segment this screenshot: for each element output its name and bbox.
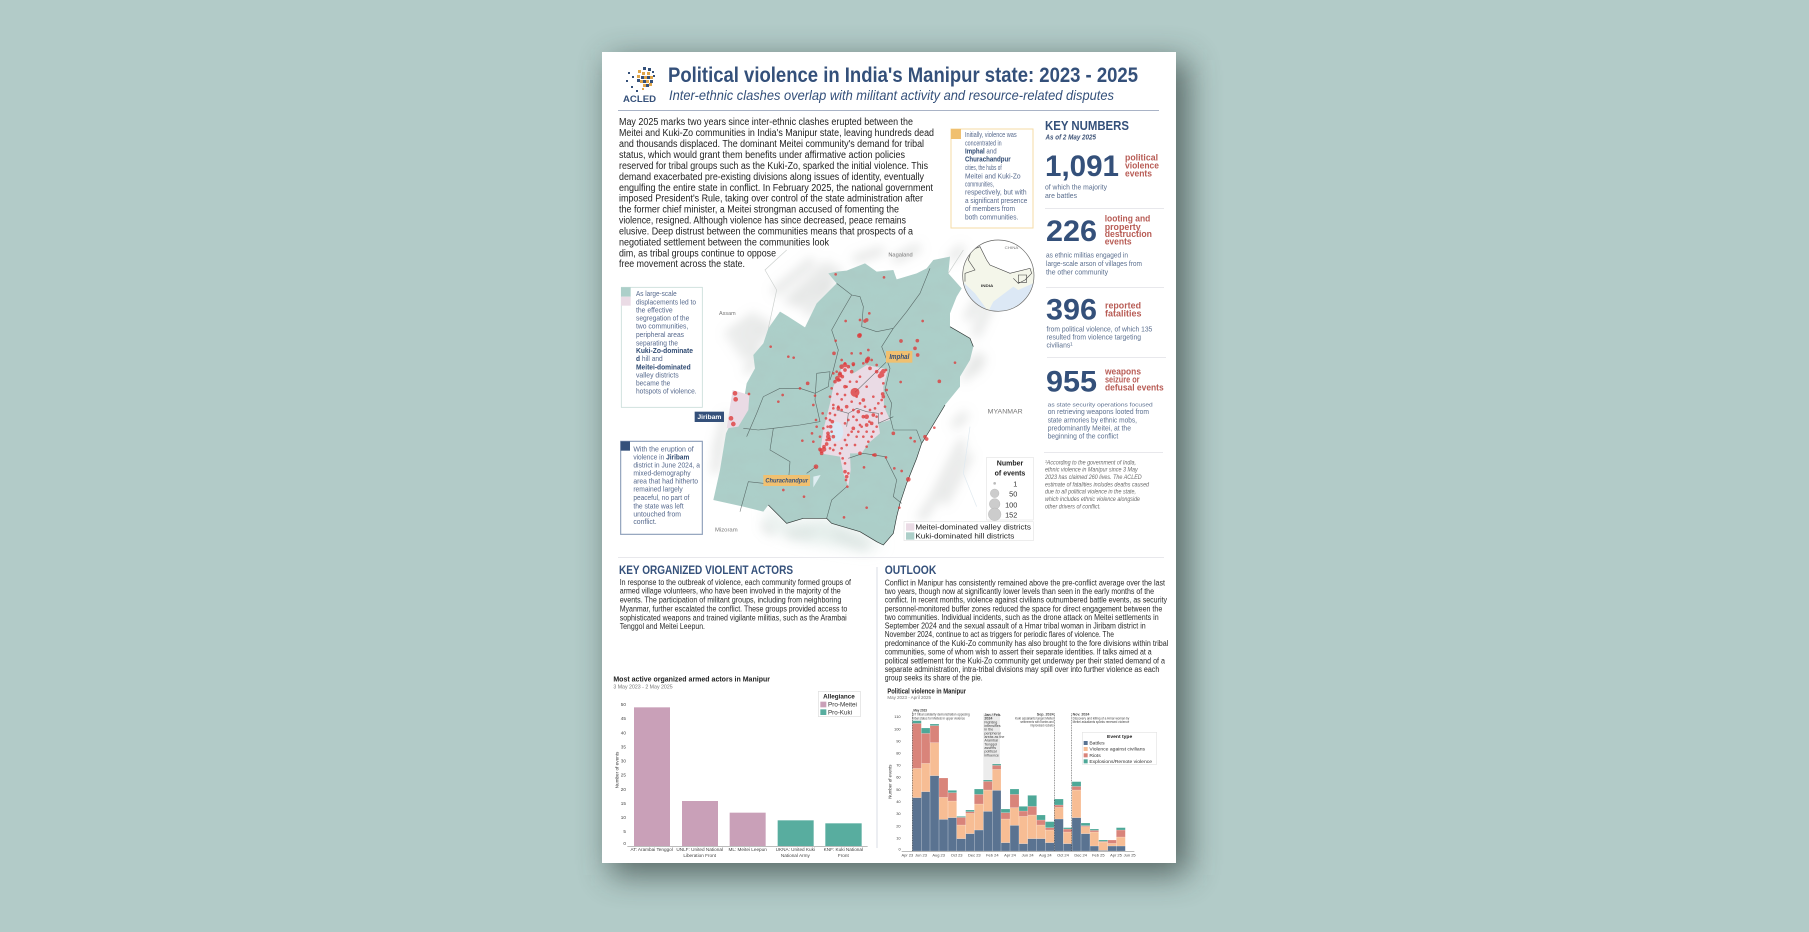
inset locator map: CHINA	[1005, 246, 1019, 250]
axes: Feb 25	[1092, 853, 1105, 858]
bar chart: most active actors: UNLF: United National	[676, 847, 723, 852]
callout: initial violence: a significant presence	[965, 196, 1027, 205]
page sheet	[602, 52, 1176, 863]
callout: segregation: valley districts	[636, 371, 679, 380]
stat: 955: weapons	[1104, 367, 1141, 377]
stat: 1,091: political	[1125, 153, 1158, 163]
stat: 396: from political violence, of which 135	[1046, 324, 1152, 333]
outlook text	[885, 578, 1168, 683]
axes: Oct 24	[1057, 853, 1070, 858]
stacked bars	[912, 721, 1125, 851]
bar chart: most active actors: 25	[621, 773, 626, 778]
state: valley districts	[727, 362, 890, 487]
axes: 70	[896, 763, 901, 768]
annotations: in the	[984, 728, 993, 732]
bar chart: most active actors: 15	[621, 801, 626, 806]
actors text: sophisticated weapons and trained vigilante militias, such as the Arambai	[620, 613, 847, 622]
axes: Jun 25	[1124, 853, 1136, 858]
page shadow	[610, 60, 1188, 875]
intro text: the former chief minister, a Meitei strongman accused of fomenting the	[619, 204, 899, 216]
legend: districts: Meitei-dominated valley districts	[915, 522, 1031, 531]
neighbouring borders	[765, 250, 963, 328]
intro text: free movement across the state.	[619, 259, 745, 270]
actors text: Myanmar, further escalated the conflict. These groups provided access to	[620, 604, 848, 613]
stat: 396: civilians¹	[1046, 341, 1073, 350]
stat: 1,091: violence	[1125, 161, 1159, 171]
axes: Aug 24	[1039, 853, 1052, 858]
callout: segregation: d hill and	[636, 354, 663, 363]
label: Imphal	[886, 351, 912, 363]
annotations: areas as the	[984, 735, 1004, 739]
stat: 226: looting and	[1105, 214, 1150, 224]
intro text: May 2025 marks two years since inter-ethnic clashes erupted between the	[619, 117, 913, 128]
axes: Number of events	[888, 765, 893, 799]
callout: segregation: displacements led to	[636, 297, 696, 306]
state relief texture	[713, 257, 973, 545]
legend: number of events: 100	[1005, 500, 1017, 509]
intro text: engulfing the entire state in conflict. In February 2025, the national government	[619, 183, 933, 194]
intro text: elusive. Deep distrust between the communities means that prospects of a	[619, 226, 913, 238]
stat: 396: fatalities	[1105, 308, 1142, 318]
callout: Jiribam: untouched from	[633, 509, 681, 518]
rivers	[963, 427, 977, 507]
callout: segregation: the effective	[636, 305, 673, 314]
heading: key numbers: KEY NUMBERS	[1045, 118, 1129, 133]
footnote	[1044, 460, 1149, 510]
callout: Jiribam: mixed-demography	[633, 468, 691, 477]
geographic labels	[715, 253, 1023, 534]
stat: 226: 226	[1046, 215, 1097, 248]
map	[621, 240, 1037, 550]
stat: 955: on retrieving weapons looted from	[1048, 407, 1149, 416]
actors text: armed village volunteers, who have been involved in the majority of the	[620, 587, 841, 596]
callout: segregation: separating the	[636, 338, 678, 347]
footnote: 2023 has claimed 260 lives. The ACLED	[1044, 474, 1142, 481]
bar chart: most active actors: Most active organized armed actors in Manipur	[613, 675, 770, 684]
annotations: Discovery and killing of a Hmar woman by	[1073, 716, 1129, 720]
outlook text: communities, some of whom wish to assert their separate identities. If talks aimed at a	[885, 648, 1152, 657]
legend: event type: Violence against civilians	[1089, 747, 1146, 753]
axes: Apr 24	[1004, 853, 1017, 858]
annotations: political	[984, 750, 997, 754]
bar chart: most active actors: 30	[621, 759, 626, 764]
annotations: asserts	[984, 746, 996, 750]
stacked chart: political violence over time	[887, 686, 1157, 858]
annotations: influence	[984, 753, 999, 757]
intro text: reserved for tribal groups such as the Kuki-Zo, sparked the initial violence. This	[619, 161, 928, 172]
annotations: tribal status for Meiteis in upper violence	[912, 716, 965, 720]
bar chart: most active actors: 45	[621, 716, 626, 721]
icon: ACLED logo: ACLED	[623, 94, 657, 104]
intro text: status, which would grant them benefits under affirmative action policies	[619, 150, 905, 161]
event dots	[731, 274, 955, 517]
callout: Jiribam: peaceful, no part of	[633, 493, 690, 502]
state: hill districts	[713, 257, 973, 545]
footnote: due to all political violence in the state,	[1045, 489, 1136, 496]
callout: Jiribam	[621, 441, 702, 534]
district boundaries	[740, 268, 930, 518]
callout: initial violence: respectively, but with	[965, 188, 1027, 197]
stat: 955: seizure or	[1105, 375, 1140, 385]
stat: 1,091: events	[1125, 169, 1152, 179]
callout: initial violence: communities,	[965, 179, 994, 188]
bar chart: most active actors: 0	[623, 841, 626, 846]
stat: 1,091: of which the majority	[1045, 183, 1107, 192]
callout: initial violence: Initially, violence was	[965, 130, 1017, 139]
legend: allegiance: Allegiance	[823, 694, 855, 701]
stat: 226: destruction	[1105, 229, 1152, 239]
geographic labels: Assam	[719, 311, 736, 317]
bar chart: most active actors: UKNA: United Kuki	[776, 847, 815, 852]
heading: key numbers: As of 2 May 2025	[1045, 134, 1096, 142]
outlook text: group seeks its share of the pie.	[885, 674, 983, 683]
legend: event type	[1082, 732, 1157, 765]
annotations: Nov. 2024	[1073, 713, 1090, 717]
state border, south and east	[768, 327, 973, 545]
annotations: settlements with bombs and	[1020, 720, 1054, 724]
annotations: intensifies	[984, 724, 1001, 728]
axes: 30	[896, 811, 901, 816]
geographic labels: MYANMAR	[988, 408, 1023, 415]
actors text: Tenggol and Meitei Leepun.	[620, 622, 705, 631]
label: Imphal: Imphal	[889, 354, 910, 361]
label: Churachandpur: Churachandpur	[765, 477, 808, 484]
icon: ACLED logo	[623, 67, 657, 104]
stat: 396: resulted from violence targeting	[1046, 333, 1141, 342]
annotations: improvised rockets	[1030, 724, 1054, 728]
intro text: imposed President's Rule, taking over control of the state administration after	[619, 194, 924, 204]
legend: event type: Explosions/Remote violence	[1089, 759, 1152, 765]
annotations: ST tribal solidarity demonstration opposing	[912, 712, 970, 716]
axes: Jun 23	[915, 853, 928, 858]
axes: 50	[896, 787, 901, 792]
intro text: demand exacerbated pre-existing divisions along issues of identity, eventually	[619, 172, 924, 183]
callout: initial violence: cities, the hubs of	[965, 163, 1002, 172]
axes: 60	[896, 775, 901, 780]
intro text: Meitei and Kuki-Zo communities in India's Manipur state, leaving hundreds dead	[619, 128, 934, 139]
callout: Jiribam: area that had hitherto	[633, 477, 698, 486]
geographic labels: Mizoram	[715, 528, 738, 534]
annotations: peripheral	[984, 731, 1001, 735]
callout: Jiribam: With the eruption of	[633, 445, 694, 454]
section: key organized violent actors: KEY ORGANIZED VIOLENT ACTORS	[619, 563, 793, 577]
callout: segregation: Kuki-Zo-dominate	[636, 346, 693, 355]
stat: 226: large-scale arson of villages from	[1046, 259, 1142, 268]
label: Churachandpur	[763, 475, 810, 486]
bars	[634, 707, 862, 846]
axes: Feb 24	[986, 853, 999, 858]
callout: initial violence: Imphal and	[965, 147, 997, 156]
southern fade	[767, 505, 883, 550]
footnote: ethnic violence in Manipur since 3 May	[1045, 467, 1138, 474]
outlook text: November 2024, continue to act as triggers for periodic flares of violence. The	[885, 630, 1114, 639]
legend: event type: Battles	[1089, 741, 1105, 747]
legend: allegiance: Pro-Meitei	[828, 703, 857, 709]
callout: segregation: two communities,	[636, 322, 688, 331]
axes	[888, 714, 1136, 858]
footnote: estimate of fatalities includes deaths caused	[1045, 481, 1149, 488]
bar chart: most active actors: KNF: Kuki National	[824, 847, 863, 852]
bar chart: most active actors: 3 May 2023 - 2 May 2025	[613, 685, 673, 691]
axes: 110	[894, 714, 901, 719]
callout: initial violence: Churachandpur	[965, 155, 1011, 164]
axes: 90	[896, 739, 901, 744]
callout: segregation: hotspots of violence.	[636, 387, 697, 396]
annotations	[912, 709, 1129, 851]
footnote: which includes ethnic violence alongside	[1045, 496, 1140, 503]
label: Jiribam: Jiribam	[697, 414, 721, 421]
stat: 955: state armories by ethnic mobs,	[1048, 415, 1137, 424]
stat: 1,091: 1,091	[1045, 150, 1119, 183]
axes: Dec 23	[968, 853, 981, 858]
subtitle: Inter-ethnic clashes overlap with militant activity and resource-related disputes	[669, 87, 1114, 103]
axes: Apr 23	[901, 853, 914, 858]
callout: Jiribam: conflict.	[633, 517, 657, 526]
event band	[983, 713, 1000, 780]
outlook text: Conflict in Manipur has consistently remained above the pre-conflict average over the last	[885, 578, 1166, 587]
axes: Apr 25	[1110, 853, 1123, 858]
annotations: Arambai	[984, 739, 998, 743]
bar chart: most active actors: ML: Meitei Leepun	[729, 847, 767, 852]
callout: initial violence	[951, 129, 1033, 228]
legend: districts: Kuki-dominated hill districts	[915, 532, 1015, 541]
legend: number of events: 1	[1013, 480, 1017, 489]
section: key organized violent actors	[619, 563, 852, 631]
stat: 396	[1046, 293, 1152, 350]
callout: Jiribam: remained largely	[633, 485, 683, 494]
legend: districts	[904, 522, 1033, 541]
axes: Aug 23	[932, 853, 946, 858]
annotations: Sep. 2024	[1037, 713, 1055, 717]
bar chart: most active actors: Liberation Front	[683, 853, 717, 858]
bar chart: most active actors: 20	[621, 787, 626, 792]
stat: 226: as ethnic militias engaged in	[1046, 251, 1128, 260]
callout: segregation: As large-scale	[636, 289, 677, 298]
intro text: and thousands displaced. The dominant Meitei community's demand for tribal	[619, 139, 924, 150]
callout: initial violence: concentrated in	[965, 138, 1002, 147]
legend: event type: Riots	[1089, 753, 1101, 759]
axes: 80	[896, 751, 901, 756]
annotations: Fighting	[984, 721, 997, 725]
stat: 226	[1046, 214, 1152, 276]
bar chart: most active actors: National Army	[781, 853, 810, 858]
legend: event type: Event type	[1107, 734, 1132, 740]
inset locator map: INDIA	[981, 283, 993, 288]
footnote: other drivers of conflict.	[1045, 503, 1101, 510]
bar chart: most active actors	[613, 675, 868, 858]
legend: allegiance: Pro-Kuki	[828, 711, 852, 717]
axes: Dec 24	[1074, 853, 1088, 858]
section: outlook: OUTLOOK	[885, 563, 937, 577]
axes: 10	[896, 835, 901, 840]
geographic labels: Nagaland	[888, 253, 913, 259]
inset locator map	[963, 240, 1037, 313]
outlook text: predominance of the Kuki-Zo community has also brought to the fore divisions within tribal	[885, 639, 1168, 648]
callout: Jiribam: violence in Jiribam	[633, 453, 689, 462]
annotations: 2024	[984, 717, 993, 721]
callout: Jiribam: district in June 2024, a	[633, 460, 701, 469]
stat: 955: beginning of the conflict	[1048, 432, 1119, 441]
intro text	[619, 117, 934, 270]
annotations: May 2023	[913, 709, 927, 713]
hill shading	[715, 247, 990, 547]
legend: number of events	[987, 457, 1033, 521]
stacked chart: political violence over time: May 2023 - April 2025	[887, 695, 931, 701]
axes: 20	[896, 823, 901, 828]
outlook text: September 2024 and the sexual assault of a Hmar tribal woman in Jiribam district in	[885, 622, 1146, 631]
section: outlook	[885, 563, 1168, 683]
annotations: Meitei assailants sparks renewed violence	[1073, 720, 1129, 724]
heading: key numbers	[1045, 118, 1129, 142]
outlook text: personnel-monitored buffer zones reduced the space for direct engagement between the	[885, 604, 1163, 613]
legend: number of events: of events	[995, 470, 1025, 477]
callout: Jiribam: the state was left	[633, 501, 684, 510]
bar chart: most active actors: 40	[621, 731, 626, 736]
stat: 955: as state security operations focused	[1048, 402, 1153, 408]
callout: initial violence: both communities.	[965, 212, 1018, 221]
bar chart: most active actors: 50	[621, 702, 626, 707]
legend: number of events: 152	[1005, 511, 1017, 520]
footnote: ¹According to the government of India,	[1045, 460, 1136, 467]
stat: 226: property	[1105, 222, 1141, 232]
stat: 396: reported	[1105, 300, 1141, 310]
callout: segregation: Meitei-dominated	[636, 362, 691, 371]
callout: initial violence: of members from	[965, 204, 1015, 213]
actors text: In response to the outbreak of violence, each community formed groups of	[620, 578, 852, 587]
outlook text: separate administration, intra-tribal divisions may spill over into further violence as each	[885, 665, 1159, 674]
legend: allegiance	[818, 691, 860, 717]
outlook text: two years, though now at significantly lower levels than seen in the early months of the	[885, 587, 1154, 596]
actors text: events. The participation of militant groups, including from neighboring	[620, 596, 841, 605]
callout: segregation: became the	[636, 379, 670, 388]
axes: 100	[894, 727, 901, 732]
bar chart: most active actors: 35	[621, 745, 626, 750]
stat: 955: 955	[1046, 366, 1097, 399]
outlook text: conflict. In recent months, violence against civilians outnumbered battle events, as security	[885, 596, 1167, 605]
bar chart: most active actors: Front	[838, 853, 849, 858]
intro text: negotiated settlement between the communities look	[619, 238, 830, 248]
stat: 955: predominantly Meitei, at the	[1048, 423, 1131, 432]
callout: segregation: segregation of the	[636, 314, 689, 323]
outlook text: political settlement for the Kuki-Zo community get underway per their stated demand of a	[885, 656, 1165, 665]
callout: initial violence: Meitei and Kuki-Zo	[965, 171, 1021, 180]
stat: 396: 396	[1046, 293, 1097, 326]
annotations: Jan / Feb.	[984, 713, 1001, 717]
axes: Jun 24	[1022, 853, 1034, 858]
intro text: dim, as tribal groups continue to oppose	[619, 248, 776, 260]
axes: 0	[898, 846, 901, 851]
stacked chart: political violence over time: Political violence in Manipur	[887, 686, 966, 695]
stat: 955: defusal events	[1105, 383, 1164, 393]
callout: segregation	[621, 287, 702, 407]
stat: 955	[1046, 366, 1164, 441]
stat: 226: events	[1105, 237, 1132, 247]
bar chart: most active actors: 10	[621, 815, 626, 820]
bar chart: most active actors: AT: Arambai Tenggol	[631, 847, 673, 852]
bar chart: most active actors: Number of events	[614, 751, 619, 788]
callout: segregation: peripheral areas	[636, 330, 684, 339]
axes: 40	[896, 799, 901, 804]
header	[618, 64, 1159, 111]
stat: 226: the other community	[1046, 267, 1108, 276]
legend: number of events: Number	[997, 461, 1023, 468]
intro text: violence, resigned. Although violence has since decreased, peace remains	[619, 216, 906, 226]
stat: 1,091	[1045, 150, 1159, 200]
annotations: Tenggol	[984, 742, 997, 746]
label: Jiribam	[695, 412, 724, 422]
actors text	[620, 578, 852, 631]
annotations: Kuki assailants target Meitei	[1015, 716, 1054, 720]
axes: Oct 23	[951, 853, 963, 858]
stat: 1,091: are battles	[1045, 191, 1077, 200]
legend: number of events: 50	[1009, 490, 1017, 499]
bar chart: most active actors: 5	[623, 829, 626, 834]
title: Political violence in India's Manipur state: 2023 - 2025	[668, 64, 1138, 87]
key numbers	[1044, 118, 1166, 510]
outlook text: two communities. Individual incidents, such as the drone attack on Meitei settlements in	[885, 613, 1159, 622]
